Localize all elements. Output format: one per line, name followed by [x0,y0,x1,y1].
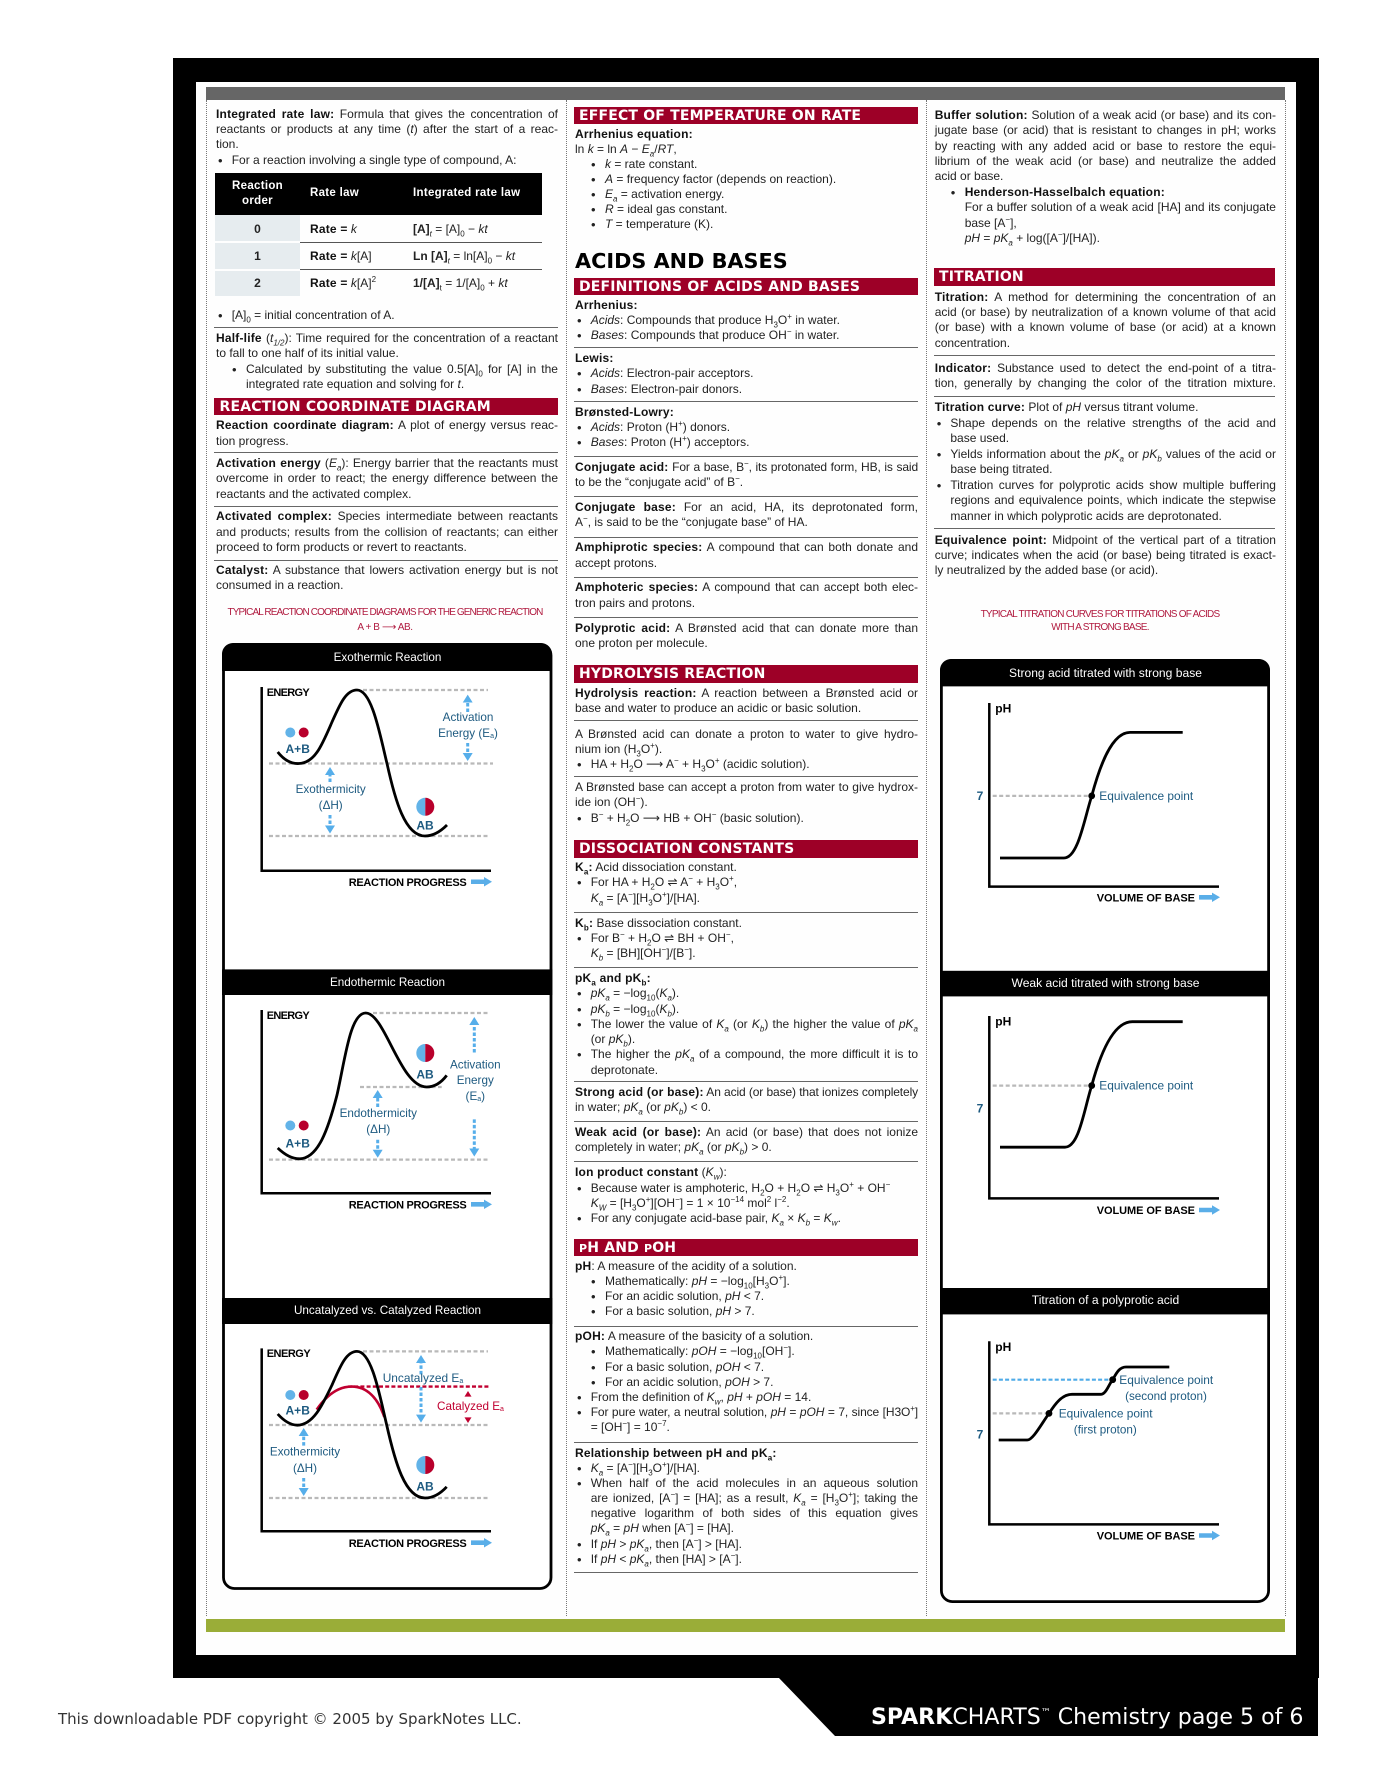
text: arrhenius definition: Arrhenius: [575,298,638,312]
text: pKa and pKb: pKb = −log10(Kb). [591,1002,679,1018]
text: buffer solution: base [A−], [965,215,1017,230]
text: bronsted-lowry definition: Brønsted-Lowry: [575,405,674,419]
header: strong acid [940,659,1270,686]
text: integrated rate law: tion. [216,137,239,151]
guide lines [269,1013,488,1160]
arrow and label: activation energy: ) [494,727,498,740]
text: strong acid [575,1085,918,1117]
text: relationship between pH and pKa: Relationship between pH and pKa: [575,1446,777,1462]
text: catalyst: consumed in a reaction. [216,578,343,592]
text: relationship between pH and pKa: pKa = pH when [A−] = [HA]. [591,1520,734,1538]
text: pKa and pKb: The higher the pKa of a compound, the more difficult it is to [591,1047,918,1064]
panel: reaction coordinate diagrams [222,643,552,1590]
text: equivalence point: Equivalence point: Midpoint of the vertical part of a titration [935,532,1276,546]
text: hydrolysis definition: Hydrolysis reaction: A reaction between a Brønsted acid or [575,686,918,700]
text: amphiprotic species: Amphiprotic species: A compound that can both donate and [575,540,918,554]
text: reaction coordinate diagram definition: tion progress. [216,434,289,448]
curve [278,1013,447,1159]
guide line [993,1084,1090,1087]
text: titration definition: concentration. [935,336,1010,350]
text: arrhenius definition: Bases: Compounds that produce OH− in water. [591,327,840,342]
text: arrhenius equation: A = frequency factor (depends on reaction). [605,172,836,186]
tick: 7: 7 [977,1428,984,1442]
text: strong acid: in water; pKa (or pKb) < 0. [575,1100,711,1117]
text: titration definition [934,290,1276,350]
arrow and label: activation energy: (E [466,1090,477,1103]
text: activation energy: reactants and the activated complex. [216,486,411,500]
arrow and label: endothermicity: (ΔH) [366,1123,390,1136]
text: half-life: Calculated by substituting the value 0.5[A]0 for [A] in the [246,362,558,378]
text: amphiprotic species: accept protons. [575,556,657,570]
text: pH: For an acidic solution, pH < 7. [605,1289,764,1303]
equivalence point: Equivalence point [1099,789,1194,803]
text: activated complex: and products; results from the collision of reactants; can either [216,525,558,539]
text: weak acid [575,1125,918,1157]
text: catalyst: Catalyst: A substance that lowers activation energy but is not [216,563,558,577]
heading: effect of temperature on rate: EFFECT OF TEMPERATURE ON RATE [579,108,861,124]
text: indicator: tion, generally by changing the color of the titration mixture. [935,376,1276,390]
text: pH: For a basic solution, pH > 7. [605,1304,755,1318]
text: titration definition: (or base) with a known volume of base (or acid) at a known [935,320,1276,334]
bottom green bar [206,1619,1285,1632]
product AB: AB [416,1479,434,1493]
text: equivalence point: curve; indicates when the acid (or base) being titrated is exact- [935,548,1276,562]
heading: definitions of acids and bases: DEFINITIONS OF ACIDS AND BASES [579,279,860,295]
table: rate laws: Rate = k [310,222,357,236]
text: titration curve: Titration curve: Plot of pH versus titrant volume. [935,400,1198,414]
text: bronsted acid hydrolysis: A Brønsted acid can donate a proton to water to give hydro- [575,727,918,741]
titration curve [999,1367,1169,1440]
text: bronsted base hydrolysis [575,780,918,827]
text: strong acid: Strong acid (or base): An acid (or base) that ionizes completely [575,1085,918,1099]
text: half-life: integrated rate equation and solving for t. [246,377,464,391]
text: bronsted-lowry definition: Acids: Proton (H+) donors. [591,419,730,434]
text: buffer solution: acid or base. [935,169,1003,183]
header: exothermic reaction: Exothermic Reaction [334,651,441,664]
axes [989,1341,1219,1524]
arrow and label: exothermicity [296,775,366,826]
text: titration curve [934,400,1276,523]
axis label: volume of base: VOLUME OF BASE [1097,1205,1195,1217]
axis label: reaction progress: REACTION PROGRESS [349,1199,467,1211]
text: activated complex: Activated complex: Species intermediate between reactants [216,509,558,523]
heading: reaction coordinate diagram: REACTION COORDINATE DIAGRAM [220,399,491,415]
text: bronsted acid hydrolysis [575,727,918,774]
product AB [416,1456,434,1493]
caption: titration curves: TYPICAL TITRATION CURVES FOR TITRATIONS OF ACIDS [981,609,1219,620]
table: rate laws: Rate = k[A] [310,248,372,262]
header: uncatalyzed vs catalyzed: Uncatalyzed vs. Catalyzed Reaction [294,1304,481,1317]
guide lines [269,690,493,836]
text: conjugate base [575,500,918,529]
text: pKa and pKb: (or pKb). [591,1032,635,1049]
arrow and label: uncatalyzed Ea [383,1363,463,1415]
text: Kb [575,916,742,963]
text: relationship between pH and pKa: When half of the acid molecules in an aqueous solution [591,1476,918,1490]
text: Ka [575,860,737,907]
text: buffer solution: librium of the weak acid (or base) and neutralize the added [935,154,1276,168]
product AB [416,798,434,832]
table: rate laws: Integrated rate law [413,186,520,198]
text: integrated rate law: reactants or products at any time (t) after the start of a reac- [216,122,558,136]
second equivalence point [1109,1373,1214,1403]
text: equivalence point [935,532,1276,577]
caption: reaction coordinate diagrams: A + B ⟶ AB. [357,622,413,633]
axes [989,703,1219,887]
text: hydrolysis definition [575,686,918,715]
axis label: volume of base: VOLUME OF BASE [1097,892,1195,904]
text: reaction coordinate diagram definition [216,418,558,448]
axis label: pH: pH [995,1340,1011,1354]
header: polyprotic acid [940,1288,1270,1314]
text: arrhenius equation: Arrhenius equation: [575,127,693,141]
reactants A+B [285,728,310,756]
header: weak acid: Weak acid titrated with strong base [1012,976,1200,990]
text: titration curve: Titration curves for polyprotic acids show multiple buffering [950,478,1276,492]
text: conjugate acid: Conjugate acid: For a base, B−, its protonated form, HB, is said [575,459,918,474]
text: indicator [934,361,1276,390]
text: buffer solution: jugate base (or acid) that is resistant to changes in pH; works [935,123,1276,137]
arrow and label: uncatalyzed Ea: a [459,1378,463,1385]
titration curve [1000,732,1183,858]
text: lewis definition [575,351,753,396]
chart: exothermic reaction diagram [262,687,498,889]
reactants A+B [285,1120,310,1150]
text: arrhenius definition [575,298,840,342]
text: half-life [216,331,558,391]
chart: polyprotic titration [977,1340,1220,1542]
text: activation energy [216,456,558,500]
arrow and label: catalyzed Ea [437,1391,504,1423]
arrow and label: activation energy: a [490,733,494,740]
text: titration curve: regions and equivalence points, which indicate the stepwise [950,493,1276,507]
chart: weak acid titration [977,1015,1220,1217]
arrow and label: activation energy: Activation [443,711,493,724]
heading: pH and pOH [574,1238,918,1256]
reactants A+B: A+B [286,1403,310,1417]
reactants A+B: A+B [286,742,310,756]
footer tab [779,1678,1318,1736]
text: activated complex: proceed to form products or revert to reactants. [216,540,467,554]
guide lines [993,1380,1112,1413]
titration curve [1000,1022,1183,1147]
text: Ka: Ka = [A−][H3O+]/[HA]. [591,890,700,907]
text: Kb: Kb: Base dissociation constant. [575,916,742,932]
text: titration curve: Shape depends on the relative strengths of the acid and [950,416,1276,430]
text: bronsted base hydrolysis: B− + H2O ⟶ HB + OH− (basic solution). [591,810,804,827]
arrow and label: exothermicity: (ΔH) [293,1462,317,1475]
table: rate laws: Rate = k[A]2 [310,274,376,290]
text: buffer solution [934,108,1276,248]
text: relationship between pH and pKa [575,1446,918,1568]
second equivalence point: Equivalence point [1119,1373,1214,1387]
table: rate laws: 0 [254,222,261,236]
arrow and label: exothermicity: Exothermicity [296,783,366,796]
text: weak acid: completely in water; pKa (or pKb) > 0. [575,1140,772,1157]
catalyzed curve [317,1387,384,1417]
copyright line: This downloadable PDF copyright © 2005 by SparkNotes LLC. [58,1710,522,1728]
heading: hydrolysis reaction [574,665,918,683]
catalyzed level [348,1385,489,1388]
table: rate laws: 2 [254,276,261,290]
axis label: volume of base: VOLUME OF BASE [1097,1530,1195,1542]
text: integrated rate law [216,107,558,167]
text: bronsted base hydrolysis: A Brønsted base can accept a proton from water to give hydrox- [575,780,918,794]
text: pKa and pKb [575,971,918,1077]
text: Ka: For HA + H2O ⇌ A− + H3O+, [591,874,737,892]
text: ion product constant: Ion product constant (Kw): [575,1165,727,1182]
text: arrhenius equation: k = rate constant. [605,157,697,171]
first equivalence point: Equivalence point [1059,1406,1153,1420]
text: polyprotic acid: Polyprotic acid: A Brønsted acid that can donate more than [575,621,918,635]
text: pKa and pKb: pKa = −log10(Ka). [591,986,679,1003]
text: polyprotic acid: one proton per molecule. [575,636,708,650]
text: pKa and pKb: pKa and pKb: [575,971,651,988]
text: arrhenius definition: Acids: Compounds that produce H3O+ in water. [591,312,840,329]
arrow and label: uncatalyzed Ea: Uncatalyzed E [383,1371,459,1385]
text: conjugate acid [575,459,918,489]
axis label: reaction progress: REACTION PROGRESS [349,877,467,889]
text: Ka: Ka: Acid dissociation constant. [575,860,737,877]
text: arrhenius equation: T = temperature (K). [605,217,713,231]
text: relationship between pH and pKa: If pH > pKa, then [A−] > [HA]. [591,1536,742,1553]
text: arrhenius equation: ln k = ln A − Ea/RT, [575,142,677,158]
text: pH: Mathematically: pH = −log10[H3O+]. [605,1273,790,1290]
table: rate laws: order [242,195,273,207]
second equivalence point: (second proton) [1125,1390,1207,1403]
text: amphiprotic species [575,540,918,570]
text: relationship between pH and pKa: Ka = [A−][H3O+]/[HA]. [591,1460,700,1477]
chart: uncatalyzed vs catalyzed diagram [262,1348,504,1550]
heading: pH and pOH: PH AND POH [579,1240,676,1256]
arrow and label: activation energy [438,703,498,753]
heading: titration: TITRATION [939,269,1024,285]
first equivalence point [1046,1406,1153,1437]
text: pOH: pOH: A measure of the basicity of a solution. [575,1329,813,1343]
text: buffer solution: Buffer solution: Solution of a weak acid (or base) and its con- [935,108,1276,122]
text: weak acid: Weak acid (or base): An acid (or base) that does not ionize [575,1125,918,1139]
axes [262,1010,491,1193]
text: buffer solution: pH = pKa + log([A−]/[HA]). [965,230,1100,248]
table: rate laws: Reaction [232,180,283,192]
header: uncatalyzed vs catalyzed [222,1298,552,1324]
arrow and label: endothermicity [340,1098,417,1150]
text: activation energy: Activation energy (Ea): Energy barrier that the reactants must [216,456,558,472]
first equivalence point: (first proton) [1074,1424,1137,1437]
arrow and label: activation energy: Energy [457,1074,494,1087]
text: equivalence point: ly neutralized by the added base (or acid). [935,563,1158,577]
top gray bar [206,87,1285,100]
text: lewis definition: Lewis: [575,351,614,365]
reactants A+B [285,1390,310,1417]
axis label: pH: pH [995,1015,1011,1029]
text: pOH: = [OH−] = 10−7. [591,1419,670,1434]
heading: acids and bases: ACIDS AND BASES [575,249,788,273]
white content sheet [196,82,1296,1655]
text: ion product constant: KW = [H3O+][OH−] = 1 × 10−14 mol2 l−2. [591,1195,790,1212]
text: pOH: Mathematically: pOH = −log10[OH−]. [605,1343,795,1361]
text: titration definition: Titration: A method for determining the concentration of an [935,290,1276,304]
axis label: reaction progress: REACTION PROGRESS [349,1538,467,1550]
text: integrated rate law: Integrated rate law: Formula that gives the concentration of [216,107,558,121]
text: pOH: For pure water, a neutral solution, pH = pOH = 7, since [H3O+] [591,1404,918,1419]
curve [278,690,447,836]
axis label: energy: ENERGY [267,1010,310,1022]
text: arrhenius equation: R = ideal gas constant. [605,202,727,216]
caption: titration curves [980,609,1220,632]
arrow and label: catalyzed Ea: a [500,1406,504,1413]
text: conjugate acid: to be the “conjugate acid” of B−. [575,474,743,489]
text: Kb: Kb = [BH][OH−]/[B−]. [591,945,696,963]
text: initial concentration note: [A]0 = initial concentration of A. [232,308,395,325]
guide lines [269,1351,488,1498]
text: half-life: to fall to one half of its initial value. [216,346,399,360]
table: rate laws: [A]t = [A]0 − kt [413,222,488,238]
text: bronsted-lowry definition: Bases: Proton (H+) acceptors. [591,434,749,449]
text: bronsted base hydrolysis: ide ion (OH−). [575,794,648,809]
text: pKa and pKb: The lower the value of Ka (or Kb) the higher the value of pKa [591,1017,918,1033]
caption: titration curves: WITH A STRONG BASE. [1051,622,1149,632]
header: exothermic reaction [222,643,552,671]
text: reaction coordinate diagram definition: Reaction coordinate diagram: A plot of energy versus reac- [216,418,558,432]
caption: reaction coordinate diagrams [228,607,543,633]
equivalence point: Equivalence point [1099,1079,1194,1093]
text: Kb: For B− + H2O ⇌ BH + OH−, [591,930,734,948]
text: titration curve: base being titrated. [950,462,1052,476]
product AB: AB [416,1068,434,1082]
text: ion product constant: Because water is amphoteric, H2O + H2O ⇌ H3O+ + OH− [591,1180,890,1197]
text: amphoteric species: Amphoteric species: A compound that can accept both elec- [575,580,918,594]
tick: 7: 7 [977,789,984,803]
text: pOH: For an acidic solution, pOH > 7. [605,1375,773,1389]
table: rate laws: 1 [254,248,261,262]
text: ion product constant [575,1165,890,1228]
text: hydrolysis definition: base and water to produce an acidic or basic solution. [575,701,861,715]
text: buffer solution: For a buffer solution of a weak acid [HA] and its conjugate [965,200,1276,214]
text: conjugate base: Conjugate base: For an acid, HA, its deprotonated form, [575,500,918,514]
uncatalyzed curve [278,1351,447,1498]
text: pH: pH: A measure of the acidity of a solution. [575,1259,797,1273]
axis label: energy: ENERGY [267,1348,311,1360]
text: amphoteric species: tron pairs and protons. [575,596,695,610]
footer title: SPARKCHARTS™ Chemistry page 5 of 6 [871,1704,1303,1730]
text: arrhenius equation [575,127,836,231]
arrow and label: exothermicity [270,1436,340,1488]
text: bronsted acid hydrolysis: HA + H2O ⟶ A− + H3O+ (acidic solution). [591,756,810,774]
arrow and label: activation energy: ) [481,1090,485,1103]
arrow and label: activation energy: Energy (E [438,727,490,740]
arrow and label: activation energy [450,1025,501,1148]
table: rate laws: Ln [A]t = ln[A]0 − kt [413,248,515,265]
text: ion product constant: For any conjugate acid-base pair, Ka × Kb = Kw. [591,1211,841,1228]
text: amphoteric species [575,580,918,610]
product AB [416,1044,434,1082]
arrow and label: catalyzed Ea: Catalyzed E [437,1400,500,1413]
header: strong acid: Strong acid titrated with strong base [1009,666,1202,680]
header: weak acid [940,971,1270,996]
text: buffer solution: by reacting with any added acid or base to restore the equi- [935,138,1276,152]
arrow and label: exothermicity: (ΔH) [319,799,343,812]
black page frame [172,58,1319,1678]
text: pOH: From the definition of Kw, pH + pOH = 14. [591,1390,811,1406]
text: lewis definition: Acids: Electron-pair acceptors. [591,366,753,380]
text: relationship between pH and pKa: If pH < pKa, then [HA] > [A−]. [591,1551,742,1568]
heading: titration [934,268,1275,286]
text: pOH: For a basic solution, pOH < 7. [605,1360,764,1374]
text: pH [575,1259,797,1318]
text: catalyst [216,563,558,592]
axes [262,1348,491,1531]
tick: 7: 7 [977,1102,984,1116]
text: relationship between pH and pKa: are ionized, [A−] = [HA]; as a result, Ka = [H3O+]; taking the [591,1490,918,1508]
reactants A+B: A+B [286,1136,310,1150]
axes [989,1016,1219,1198]
arrow and label: endothermicity: Endothermicity [340,1107,417,1120]
arrow and label: activation energy: a [477,1096,481,1103]
text: bronsted acid hydrolysis: nium ion (H3O+). [575,741,662,758]
arrow and label: activation energy: Activation [450,1058,501,1071]
header: endothermic reaction [222,969,552,995]
arrow and label: exothermicity: Exothermicity [270,1446,340,1458]
text: titration curve: manner in which polyprotic acids are deprotonated. [950,509,1222,523]
chart: endothermic reaction diagram [262,1010,501,1211]
text: arrhenius equation: Ea = activation energy. [605,187,724,204]
panel: titration curves [940,659,1270,1603]
chart: strong acid titration [977,702,1220,904]
header: endothermic reaction: Endothermic Reaction [330,976,445,989]
product AB: AB [416,818,434,832]
text: polyprotic acid [575,621,918,650]
axis label: energy: ENERGY [267,687,310,699]
heading: dissociation constants [574,840,918,858]
text: integrated rate law: For a reaction involving a single type of compound, A: [232,153,517,167]
text: titration curve: Yields information about the pKa or pKb values of the acid or [950,447,1276,463]
table: rate laws: Rate law [310,186,359,198]
text: buffer solution: Henderson-Hasselbalch equation: [965,185,1165,199]
text: activation energy: overcome in order to react; the energy difference between the [216,471,558,485]
header: polyprotic acid: Titration of a polyprotic acid [1032,1293,1179,1307]
text: pOH [575,1329,918,1434]
table: rate laws [215,173,542,296]
text: titration curve: base used. [950,431,1009,445]
text: conjugate base: A−, is said to be the “conjugate base” of HA. [575,514,808,529]
axes [262,687,491,871]
text: titration definition: acid (or base) by neutralization of a known volume of that acid [935,305,1276,319]
text: indicator: Indicator: Substance used to detect the end-point of a titra- [935,361,1276,375]
text: bronsted-lowry definition [575,405,749,449]
heading: hydrolysis reaction: HYDROLYSIS REACTION [579,666,766,682]
text: lewis definition: Bases: Electron-pair donors. [591,382,742,396]
text: activated complex [216,509,558,554]
caption: reaction coordinate diagrams: TYPICAL REACTION COORDINATE DIAGRAMS FOR THE GENERIC REACTION [228,607,542,618]
text: relationship between pH and pKa: negative logarithm of both sides of this equation gives [591,1506,918,1520]
table: rate laws: 1/[A]t = 1/[A]0 + kt [413,276,508,292]
guide line [993,795,1090,797]
axis label: pH: pH [995,702,1011,716]
heading: dissociation constants: DISSOCIATION CONSTANTS [579,841,794,857]
text: pKa and pKb: deprotonate. [591,1063,658,1077]
text: half-life: Half-life (t1/2): Time required for the concentration of a reactant [216,331,558,348]
